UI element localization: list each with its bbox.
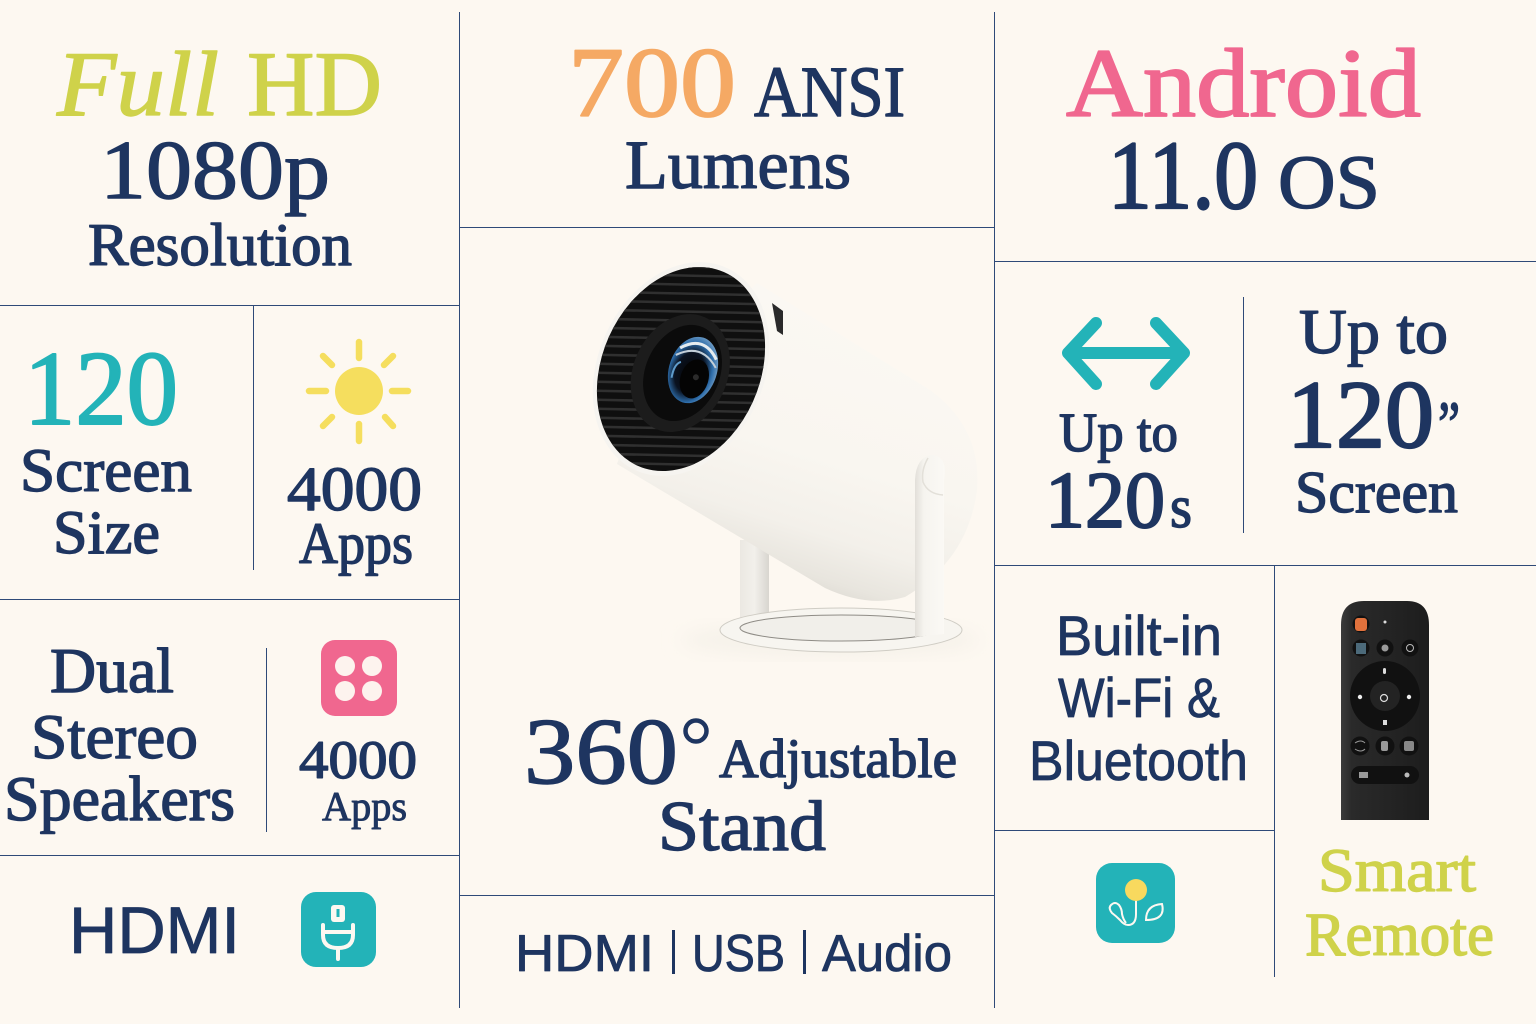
heading: 700: 700 [568,27,736,138]
text: Up to: Up to [1299,297,1448,367]
panel: dual stereo speakers [4,636,235,834]
panel: connectivity [1029,604,1248,792]
panel: ports list [515,925,952,983]
panel: Full HD resolution [56,33,382,278]
heading: Full HD [56,33,382,135]
panel: screen size 120 inch [1287,297,1460,525]
heading: 120 inch: 120 [1287,361,1434,468]
text: Speakers: Speakers [4,764,235,834]
text: Up to: Up to [1059,402,1178,463]
text: Smart: Smart [1318,838,1476,905]
text: 4000: 4000 [299,730,417,790]
divider bar [803,930,806,974]
stand front post [740,540,769,625]
side button [772,303,783,335]
panel: 700 ANSI lumens [568,27,905,203]
heading: 120 inch: ” [1438,389,1460,462]
stand ring base [720,608,962,652]
panel: throw distance [1045,323,1192,545]
text: Audio: Audio [822,925,952,983]
text: Screen: Screen [1295,459,1458,525]
text: Remote: Remote [1305,902,1494,969]
illustration: remote control [1341,601,1429,820]
text: ANSI: ANSI [754,52,905,132]
heading: 360 degrees: 360 [524,700,678,804]
icon: teal app with sprout [1096,863,1175,943]
text: 120s: s [1170,474,1192,540]
text: Apps: Apps [299,511,413,576]
panel: screen size [20,330,192,567]
degree sign [686,720,706,742]
projector body [617,283,977,601]
text: Apps: Apps [322,783,407,829]
heading: Android: Android [1066,30,1421,138]
stand rear arm [915,455,945,637]
panel: HDMI [69,892,376,967]
panel: Android OS [1066,30,1421,230]
heading: 120: 120 [24,330,178,447]
text: OS: OS [1278,141,1380,225]
text: Adjustable: Adjustable [719,728,957,789]
d-pad [1350,661,1420,731]
text: Dual: Dual [50,636,174,706]
front face with vent grille and lens [596,267,766,471]
text: Built-in: Built-in [1056,604,1222,667]
text: Resolution: Resolution [88,212,352,278]
text: 11.0: 11.0 [1108,122,1258,230]
text: Size: Size [53,500,160,567]
text: Lumens: Lumens [625,127,851,203]
icon: pink app grid [321,640,397,716]
icon: HDMI plug [301,892,376,967]
text: Stereo: Stereo [31,702,198,772]
icon: sun [309,342,408,441]
text: Bluetooth: Bluetooth [1029,729,1248,792]
text: Wi-Fi &: Wi-Fi & [1058,666,1220,729]
panel: 4000 apps with grid icon [299,640,417,829]
soft shadow [680,622,980,658]
panel: smart remote [1305,601,1494,969]
panel: 360 adjustable stand [524,700,957,866]
text: 4000: 4000 [287,456,422,524]
top buttons [1352,616,1418,656]
lens [660,330,726,410]
panel: 4000 apps with sun [287,342,422,576]
text: Stand: Stand [658,788,826,866]
lower buttons [1350,736,1419,784]
text: HDMI: HDMI [69,893,240,967]
text: 1080p: 1080p [100,124,330,217]
text: Screen: Screen [20,438,192,505]
text: HDMI: HDMI [515,925,654,983]
heading: Full HD: HD [247,33,382,135]
text: USB: USB [692,925,785,983]
divider bar [672,930,675,974]
illustration: white projector on stand [596,267,962,652]
text: 120s: 120 [1045,457,1165,545]
icon: double arrow [1068,323,1184,384]
heading: Full HD: Full [56,33,219,135]
